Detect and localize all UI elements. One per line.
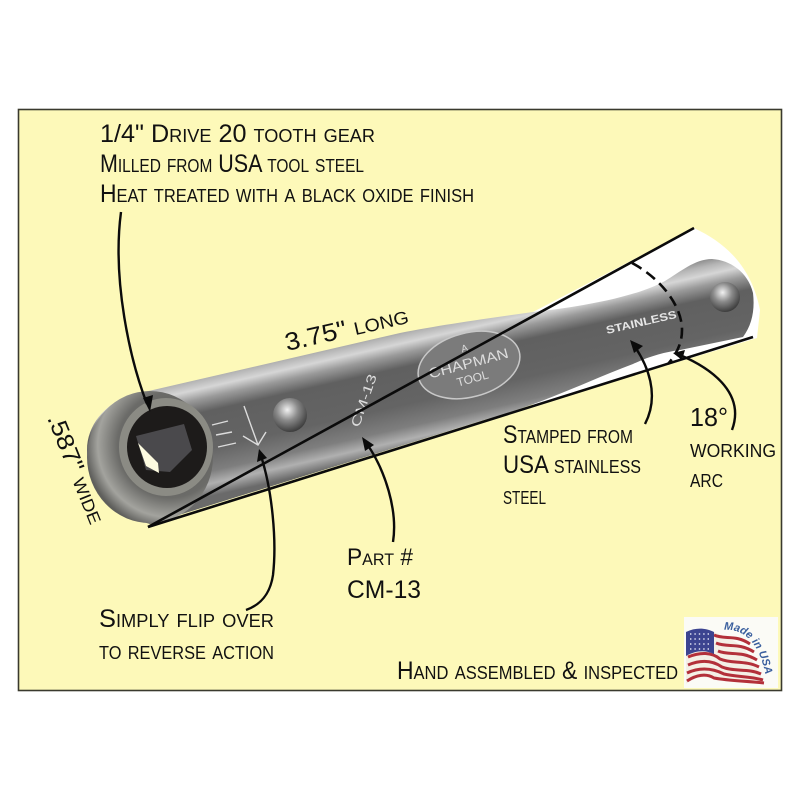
stars bbox=[690, 634, 712, 649]
wrench bbox=[87, 259, 754, 524]
white highlight behind wrench bbox=[533, 228, 760, 406]
label: working arc: arc bbox=[690, 463, 723, 493]
heading text: gear specs: Heat treated with a black oxide finish bbox=[100, 180, 474, 208]
wrench body bbox=[87, 259, 754, 524]
square drive interior bbox=[136, 424, 192, 472]
rivet right bbox=[710, 282, 740, 312]
footer text: Hand assembled & inspected bbox=[397, 657, 678, 685]
logo oval: TOOL bbox=[455, 367, 490, 389]
label: working arc: working bbox=[690, 433, 776, 463]
label: stamped: steel bbox=[503, 480, 546, 510]
stamped part number: CM-13 bbox=[348, 372, 380, 429]
label: flip over bbox=[99, 605, 274, 665]
label: flip over: to reverse action bbox=[99, 637, 274, 665]
logo oval: A bbox=[460, 343, 470, 355]
arrowheads bbox=[143, 340, 685, 462]
flag canton bbox=[686, 629, 714, 656]
label: part number: Part # bbox=[347, 544, 414, 571]
label: stamped: USA stainless bbox=[503, 451, 641, 479]
logo oval bbox=[410, 321, 528, 409]
label: stamped: Stamped from bbox=[503, 421, 633, 449]
label: working arc: 18° bbox=[690, 402, 728, 432]
arrow to reverse mark bbox=[246, 456, 274, 610]
background panel bbox=[18, 110, 782, 690]
made in USA lettering bbox=[724, 630, 767, 684]
label: flip over: Simply flip over bbox=[99, 605, 274, 633]
dashed arc bbox=[632, 263, 682, 364]
heading text: gear specs bbox=[100, 120, 474, 208]
label: part number bbox=[347, 544, 421, 604]
label: working arc bbox=[690, 402, 776, 493]
stamped STAINLESS: STAINLESS bbox=[605, 309, 678, 337]
made in USA flag badge: Made in USA bbox=[724, 622, 772, 674]
head end shading bbox=[87, 391, 213, 523]
square drive opening bbox=[138, 443, 159, 473]
heading text: gear specs: 1/4" Drive 20 tooth gear bbox=[100, 120, 375, 148]
label: width: .587" wide bbox=[41, 410, 110, 528]
flag stripes bbox=[686, 629, 764, 684]
stamped direction marks bbox=[212, 406, 266, 447]
rivet left bbox=[273, 398, 307, 432]
label: stamped bbox=[503, 421, 641, 510]
arrows bbox=[119, 212, 735, 610]
heading text: gear specs: Milled from USA tool steel bbox=[100, 150, 364, 178]
made in USA flag badge bbox=[684, 617, 778, 688]
logo oval: CHAPMAN bbox=[427, 345, 510, 381]
working arc lines bbox=[148, 228, 753, 527]
socket collar bbox=[119, 398, 213, 496]
arrow to stainless bbox=[633, 344, 652, 424]
arrow to arc bbox=[680, 355, 735, 430]
label: length: 3.75" long bbox=[282, 301, 411, 357]
arrow to part number bbox=[367, 444, 394, 542]
arrow to socket bbox=[119, 212, 147, 404]
label: part number: CM-13 bbox=[347, 576, 421, 604]
socket hole bbox=[127, 406, 207, 488]
